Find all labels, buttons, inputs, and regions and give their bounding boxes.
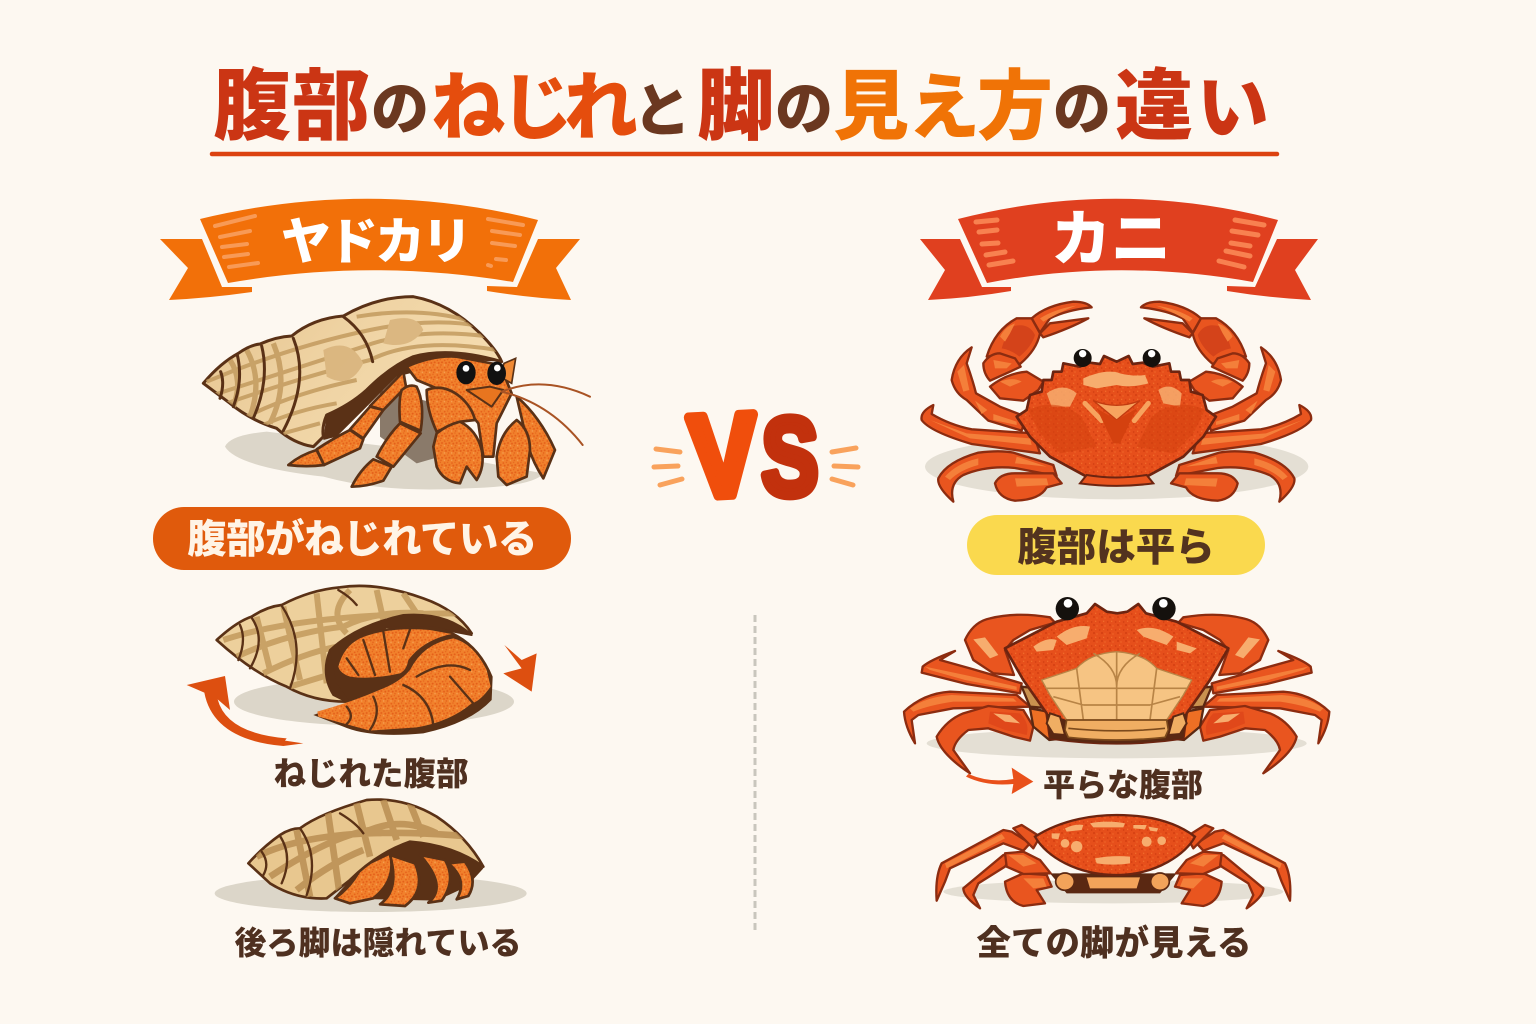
title: れ (564, 66, 638, 149)
VS mark: S (762, 395, 818, 518)
shadow (927, 728, 1307, 758)
pill: abdomen flat (967, 515, 1265, 575)
shadow (234, 678, 514, 726)
body (407, 356, 512, 457)
eyes (1056, 597, 1176, 620)
shadow (215, 875, 527, 912)
rear legs and hollow (380, 390, 555, 478)
title: 部 (292, 62, 370, 150)
title: 見 (833, 65, 909, 150)
title: 違 (1115, 62, 1193, 150)
shell (248, 800, 483, 898)
title (213, 62, 1269, 150)
title: 脚 (697, 62, 775, 150)
title: 腹 (213, 62, 291, 150)
crab legs (904, 615, 1329, 773)
carapace (1005, 604, 1228, 743)
pill: abdomen twisted (153, 507, 571, 570)
claws (427, 388, 530, 485)
label: all legs visible: 全ての脚が見える (977, 924, 1251, 963)
shadow (225, 432, 543, 489)
divider (754, 615, 756, 930)
illustration: crab main (921, 302, 1311, 502)
VS mark: V (686, 389, 760, 521)
title: い (1197, 69, 1269, 149)
shell body dark rim (323, 352, 502, 440)
leg mid (352, 386, 422, 487)
title: の (775, 77, 833, 142)
head and eyes (456, 358, 516, 407)
illustration: hermit twisted abdomen (187, 586, 537, 746)
shadow (943, 880, 1283, 903)
twist arrow left (187, 676, 303, 746)
title: 方 (977, 65, 1053, 150)
legs (335, 853, 473, 906)
label: flat abdomen: 平らな腹部 (1043, 767, 1203, 803)
title: と (633, 79, 691, 144)
title underline (212, 152, 1277, 156)
title: ね (431, 66, 505, 149)
title: じ (501, 69, 573, 149)
crab legs (936, 825, 1290, 908)
leg left (288, 372, 406, 466)
banner: crab (920, 199, 1318, 300)
carapace (1017, 356, 1216, 486)
carapace (1035, 815, 1195, 875)
dark interior (333, 841, 483, 901)
pill: abdomen flat: 腹部は平ら (1017, 526, 1215, 570)
title: の (371, 77, 429, 142)
shell (217, 586, 472, 702)
title: の (1053, 77, 1111, 142)
label: twisted abdomen: ねじれた腹部 (273, 756, 469, 792)
lower body band (1050, 873, 1177, 893)
abdomen plate (1042, 652, 1192, 740)
VS mark (654, 389, 858, 521)
illustration: flat abdomen crab (904, 597, 1329, 794)
arrow to abdomen (966, 768, 1033, 794)
crab legs and claws (921, 302, 1311, 502)
shadow (925, 434, 1308, 499)
twisted abdomen (313, 627, 493, 735)
twist arrow right (503, 645, 537, 692)
illustration: hermit hidden legs (215, 800, 527, 912)
banner: hermit crab (160, 199, 580, 300)
dark aperture rim (326, 615, 472, 707)
banner: hermit crab: ヤドカリ (281, 214, 469, 270)
title: え (908, 69, 980, 149)
shell (203, 297, 502, 447)
banner: crab: カニ (1051, 206, 1171, 273)
label: hidden rear legs: 後ろ脚は隠れている (234, 925, 522, 961)
illustration: hermit crab main (203, 297, 590, 489)
antennae (502, 384, 590, 445)
illustration: crab all legs visible (936, 815, 1290, 908)
eyes (1074, 349, 1161, 367)
pill: abdomen twisted: 腹部がねじれている (187, 517, 537, 562)
